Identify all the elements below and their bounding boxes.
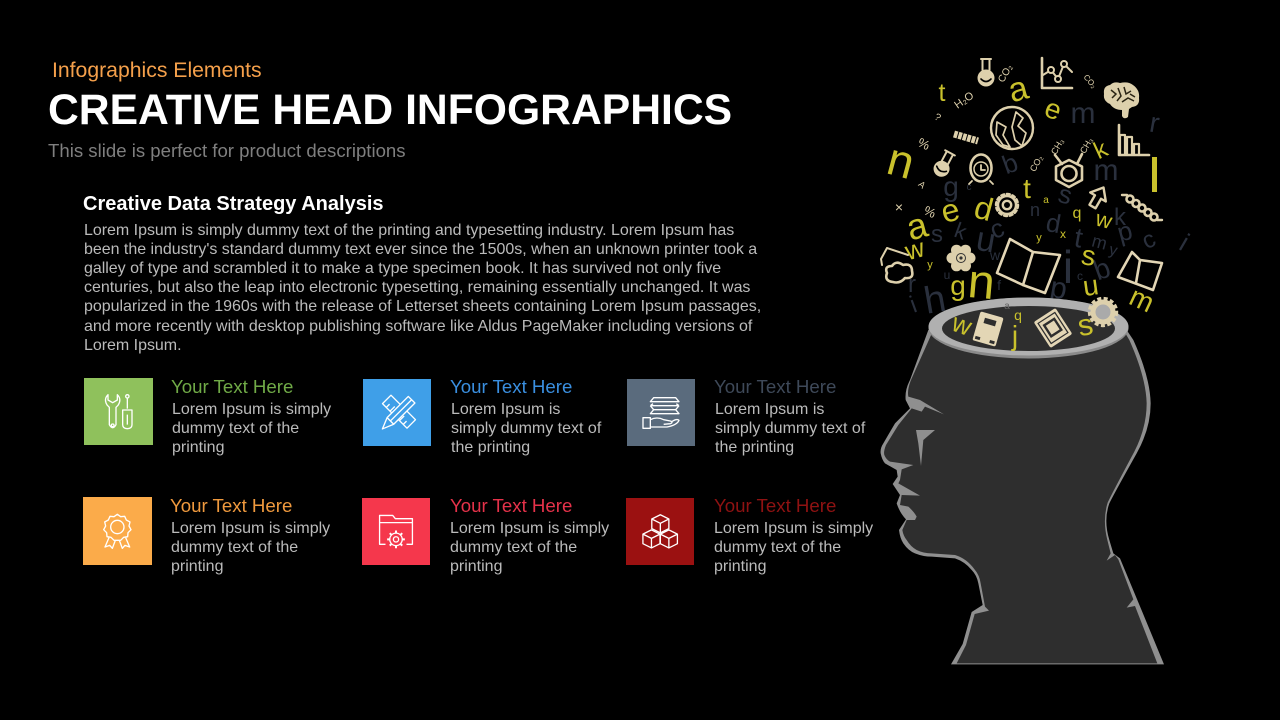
small formula labels: ? [932, 112, 943, 124]
yellow letters: w [901, 232, 928, 266]
icon: wrench and screwdriver [84, 378, 153, 445]
subtitle: This slide is perfect for product descriptions [48, 140, 406, 161]
item text: Lorem Ipsum is simply [172, 401, 331, 418]
dark letters: u [944, 268, 950, 282]
feature 2: design [363, 376, 602, 456]
icon: rim gear [1090, 298, 1116, 326]
item text [714, 520, 874, 575]
dark letters: c [1077, 269, 1083, 283]
item text [171, 520, 330, 575]
body paragraph: galley of type and scrambled it to make a type specimen book. It has survived not only five [84, 260, 721, 277]
dark letters: b [998, 147, 1022, 180]
item text: Lorem Ipsum is [451, 401, 560, 418]
dark letters: s [1055, 178, 1075, 210]
item heading: Your Text Here [714, 495, 836, 516]
yellow letters: x [1060, 227, 1066, 241]
icon: tilted flask [931, 149, 957, 180]
dark letters: p [1114, 215, 1136, 248]
dark letters: p [1048, 271, 1070, 306]
icon: pencil and ruler [363, 379, 431, 446]
yellow letters: m [1125, 280, 1159, 318]
body paragraph: been the industry's standard dummy text ever since the 1500s, when an unknown printer took a [84, 241, 757, 258]
dark letters: i [1174, 228, 1195, 257]
item heading: Your Text Here [450, 376, 572, 397]
dark letters: t [1072, 222, 1085, 254]
yellow letters: s [1079, 239, 1098, 272]
head silhouette [881, 330, 1164, 664]
icon: alarm clock [969, 154, 993, 184]
dark letters: f [997, 277, 1001, 293]
yellow letters: n [882, 132, 920, 189]
dark letters: i [1063, 241, 1073, 293]
title: CREATIVE HEAD INFOGRAPHICS [48, 86, 732, 134]
yellow letters: n [966, 255, 997, 310]
small formula labels: CO₂ [1028, 153, 1045, 173]
dark letters: r [1147, 107, 1162, 139]
body paragraph: and more recently with desktop publishing software like Aldus PageMaker including versions of [84, 318, 752, 335]
body paragraph: centuries, but also the leap into electronic typesetting, remaining essentially unchanged. It was [84, 279, 750, 296]
eyebrow label: Infographics Elements [52, 59, 262, 82]
item text: dummy text of the [714, 539, 841, 556]
dark letters: m [1090, 231, 1109, 254]
dark letters: k [951, 217, 971, 245]
yellow letters: t [1023, 173, 1031, 204]
icon: award ribbon [83, 497, 152, 565]
icon: open book [997, 239, 1060, 293]
item text: printing [171, 558, 223, 575]
item heading: Your Text Here [450, 495, 572, 516]
small formula labels: % [915, 135, 933, 153]
yellow letters: a [902, 203, 933, 248]
feature 4: award [83, 495, 330, 575]
small formula labels: CH₃ [1049, 136, 1066, 156]
icon: atom flower [946, 245, 976, 271]
item text: printing [714, 558, 766, 575]
icon: line chart [1042, 58, 1072, 88]
item heading: Your Text Here [171, 376, 293, 397]
item text [451, 401, 602, 456]
item text: dummy text of the [450, 539, 577, 556]
yellow letters: d [971, 189, 997, 228]
icon: arrow [1085, 183, 1111, 211]
yellow letters: y [1036, 232, 1042, 244]
icon: cloud and line [881, 248, 912, 282]
item text: Lorem Ipsum is simply [171, 520, 330, 537]
small formula labels: H₂O [952, 89, 977, 111]
head opening rim [928, 298, 1128, 358]
section heading: Creative Data Strategy Analysis [83, 193, 384, 215]
dark letters: c [1138, 225, 1160, 255]
dark letters: y [1107, 241, 1119, 260]
icon: newspaper [1034, 308, 1072, 348]
dark letters: m [1070, 97, 1096, 130]
small formula labels: × [895, 199, 903, 215]
yellow letters: y [927, 259, 933, 271]
item text: simply dummy text of [715, 420, 865, 437]
yellow letters: k [1090, 135, 1113, 165]
small formula labels: A [916, 179, 927, 190]
icon: flask [978, 59, 994, 86]
yellow letters [882, 69, 1159, 351]
dark letters: b [1089, 252, 1114, 286]
dark letters: k [1114, 204, 1127, 231]
item text: dummy text of the [172, 420, 299, 437]
yellow letters: a [1004, 69, 1032, 110]
item text [172, 401, 332, 456]
item text: simply dummy text of [451, 420, 601, 437]
icon: dna small [954, 134, 978, 141]
dark letters: n [1030, 200, 1040, 220]
icon: globe [991, 107, 1033, 149]
item text: the printing [715, 439, 794, 456]
feature 1: tools [84, 376, 332, 456]
icon: layers on hand [627, 379, 695, 446]
icon: folder with gear [362, 498, 430, 565]
yellow letters: q [1073, 205, 1081, 222]
dark letters: g [943, 171, 959, 202]
item text: the printing [451, 439, 530, 456]
body paragraph [84, 222, 761, 354]
item text [450, 520, 610, 575]
dark letters: i [906, 291, 921, 319]
feature 5: settings folder [362, 495, 610, 575]
icon: brain [1104, 82, 1139, 118]
dark letters [906, 97, 1195, 323]
dark letters: m [1094, 154, 1118, 187]
item text [715, 401, 866, 456]
dark letters: u [973, 220, 999, 261]
dark letters: d [1044, 207, 1063, 239]
feature 3: layers [627, 376, 866, 456]
feature 6: cubes [626, 495, 874, 575]
item heading: Your Text Here [714, 376, 836, 397]
dark letters: s [931, 221, 943, 248]
body paragraph: Lorem Ipsum. [84, 337, 182, 354]
yellow letters: w [947, 307, 976, 342]
item text: printing [172, 439, 224, 456]
icon: small book [1118, 252, 1162, 290]
icon: bar chart [1119, 125, 1149, 155]
dark letters: r [908, 271, 916, 298]
dark letters: w [989, 247, 1001, 263]
small formula labels: CO₂ [996, 63, 1015, 85]
item text: Lorem Ipsum is simply [450, 520, 609, 537]
yellow letters: q [1014, 307, 1022, 323]
icon: notepad [972, 311, 1004, 347]
item text: Lorem Ipsum is [715, 401, 824, 418]
small formula labels: % [921, 203, 939, 221]
small formula labels [895, 63, 1098, 312]
item text: Lorem Ipsum is simply [714, 520, 873, 537]
small formula labels: CH₃ [1078, 135, 1095, 155]
dark letters: c [966, 182, 972, 193]
item text: printing [450, 558, 502, 575]
dark letters: h [921, 278, 949, 323]
yellow letters: a [1043, 195, 1049, 206]
body paragraph: Lorem Ipsum is simply dummy text of the printing and typesetting industry. Lorem Ipsum has [84, 222, 734, 238]
icon: small gear [996, 194, 1018, 216]
icon: stacked cubes [626, 498, 694, 565]
nose crease [916, 430, 935, 466]
small formula labels: a [1004, 301, 1010, 312]
body paragraph: popularized in the 1960s with the release of Letterset sheets containing Lorem Ipsum passages, [84, 298, 761, 315]
item heading: Your Text Here [170, 495, 292, 516]
dark letters: c [986, 212, 1008, 245]
yellow letters: s [1075, 308, 1096, 343]
yellow letters: e [1041, 92, 1066, 126]
yellow letters: e [937, 191, 963, 230]
small formula labels: CO₂ [1082, 73, 1098, 90]
item text: dummy text of the [171, 539, 298, 556]
icon: benzene molecule [1055, 154, 1082, 187]
yellow letters: u [1081, 269, 1101, 302]
yellow letters: g [950, 270, 966, 301]
icon: large dna [1122, 195, 1162, 220]
yellow letters: w [1092, 205, 1115, 234]
yellow letters: t [939, 79, 946, 107]
yellow letters: j [1011, 320, 1018, 351]
